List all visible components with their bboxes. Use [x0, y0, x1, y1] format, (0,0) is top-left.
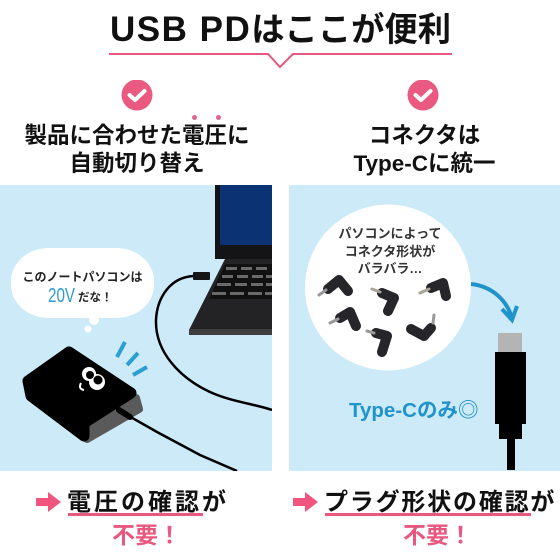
- cable from charger to laptop: [156, 276, 272, 410]
- white circle with caption and adapters: コネクタ形状が: [345, 244, 435, 259]
- panel: voltage auto switching: [0, 185, 272, 471]
- underline: [68, 513, 203, 516]
- speech bubble: 20V: [48, 285, 75, 307]
- heading: left feature: [24, 80, 250, 176]
- right heading text: Type-Cに統一: [353, 151, 496, 176]
- panel: type-c connector: [289, 185, 560, 471]
- conclusion text: プラグ形状の確認が: [324, 489, 556, 516]
- icon: right check badge: [408, 80, 438, 110]
- charger cable: [120, 411, 237, 471]
- arrow: [293, 492, 318, 512]
- unneeded text: 不要！: [403, 522, 472, 548]
- speech bubble: だな！: [78, 291, 112, 304]
- left heading text: 自動切り替え: [69, 151, 204, 176]
- white circle with caption and adapters: [305, 204, 471, 370]
- emphasis dots: [192, 115, 221, 120]
- speech bubble: このノートパソコンは: [22, 270, 143, 284]
- laptop usb plug: [193, 272, 210, 280]
- type-c label: Type-Cのみ◎: [349, 399, 478, 422]
- title: USB PDはここが便利: [110, 10, 451, 49]
- laptop: [189, 185, 272, 335]
- left heading text: [24, 123, 250, 176]
- white circle with caption and adapters: バラバラ…: [358, 261, 422, 276]
- curved arrow: [471, 284, 517, 320]
- icon: left check badge: [122, 80, 152, 110]
- conclusion text: 電圧の確認が: [67, 489, 229, 516]
- speech bubble: [11, 248, 154, 332]
- heading: right feature: [353, 80, 496, 176]
- left heading text: 製品に合わせた電圧に: [24, 123, 250, 148]
- right heading text: コネクタは: [369, 123, 480, 148]
- charger plug: [119, 410, 130, 417]
- right heading text: [353, 123, 496, 176]
- left conclusion: [36, 489, 229, 548]
- underline: [325, 513, 531, 516]
- dc adapters: [319, 280, 446, 352]
- power bank: [28, 352, 139, 439]
- right conclusion: [293, 489, 556, 548]
- signal lines: [117, 342, 147, 375]
- title underline with chevron: [109, 53, 452, 68]
- white circle with caption and adapters: パソコンによって: [339, 226, 441, 241]
- unneeded text: 不要！: [112, 522, 181, 548]
- type-c plug: [495, 333, 526, 470]
- arrow: [36, 492, 61, 512]
